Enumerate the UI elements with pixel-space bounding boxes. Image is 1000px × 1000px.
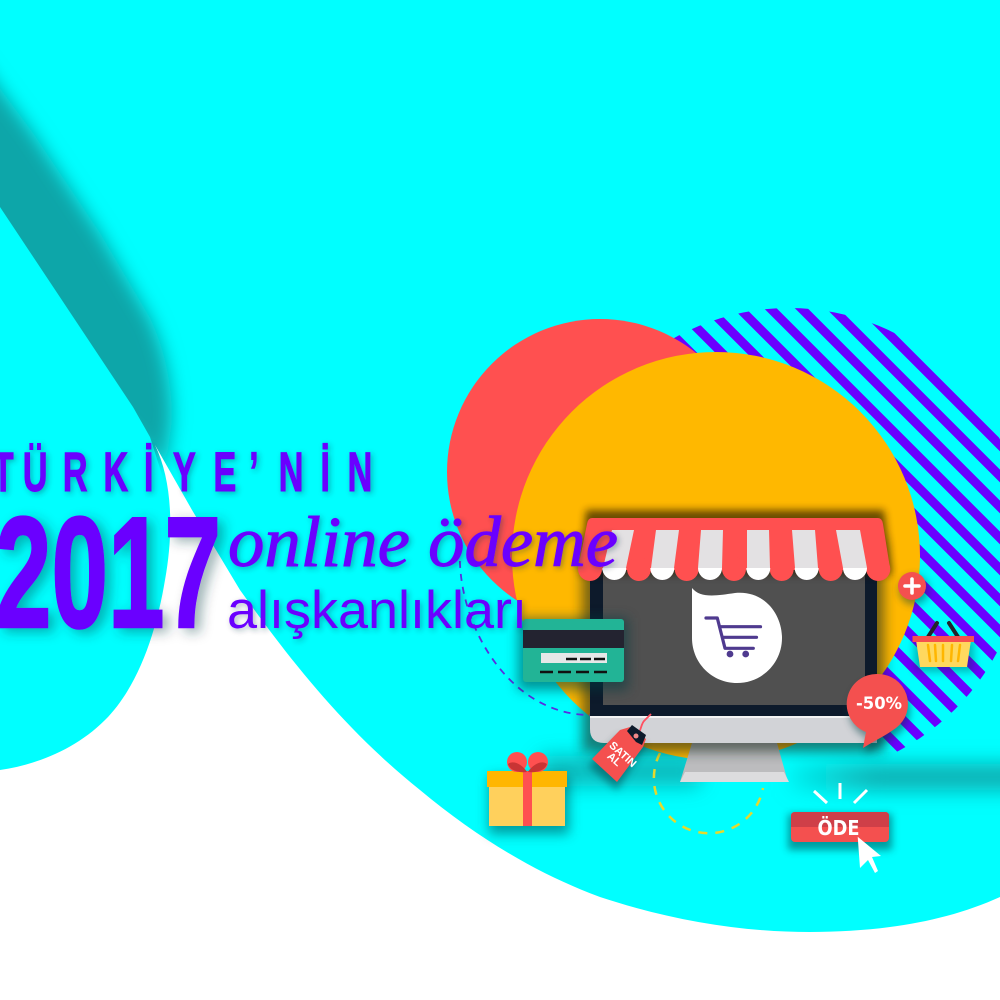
subtitle: alışkanlıkları: alışkanlıkları bbox=[227, 581, 527, 640]
gift box bbox=[487, 752, 569, 834]
dashed purple arc bbox=[460, 548, 590, 715]
cursor arrow bbox=[858, 837, 881, 873]
monitor stand bbox=[680, 743, 789, 782]
icon: bow bbox=[507, 752, 548, 772]
subtitle: online ödeme: online ödeme bbox=[228, 502, 618, 582]
awning shadow bbox=[580, 510, 892, 575]
pay button: ÖDE bbox=[818, 816, 860, 840]
red circle bbox=[447, 319, 753, 625]
shopping basket bbox=[912, 623, 974, 672]
icon: shopping cart bbox=[706, 618, 760, 656]
ground shadow band under monitor bbox=[540, 756, 700, 786]
price tag: satın al: SATIN bbox=[607, 740, 639, 770]
plus badge bbox=[898, 572, 929, 605]
dashed yellow arc bbox=[654, 753, 763, 833]
awning bbox=[578, 510, 892, 581]
striped circle bbox=[674, 308, 1000, 752]
price tag: satın al bbox=[588, 714, 651, 790]
drop with cart icon bbox=[692, 588, 782, 683]
monitor bbox=[582, 540, 884, 782]
ground shadow band right bbox=[790, 764, 1000, 790]
discount bubble bbox=[847, 674, 910, 754]
monitor body bbox=[590, 540, 877, 743]
white wave shape bbox=[0, 445, 1000, 1000]
yellow circle bbox=[512, 352, 920, 760]
fold shadow bbox=[0, 48, 172, 470]
title: 2017: 2017 bbox=[0, 485, 221, 661]
click rays bbox=[814, 783, 867, 803]
monitor screen bbox=[603, 565, 865, 705]
credit card bbox=[518, 618, 628, 690]
title: türkiye'nin: TÜRKİYE’NİN bbox=[0, 440, 372, 503]
monitor shadow bbox=[582, 540, 884, 752]
discount bubble: -50% bbox=[856, 694, 902, 713]
pay button bbox=[788, 812, 892, 850]
price tag: satın al: AL bbox=[605, 750, 624, 769]
